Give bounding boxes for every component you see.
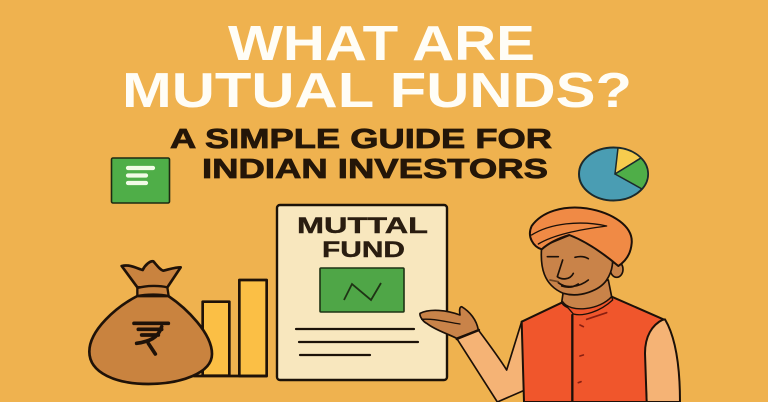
- title: [122, 17, 632, 118]
- document sheet: [277, 205, 447, 380]
- right arm: [643, 319, 680, 402]
- subtitle: [170, 123, 552, 184]
- title: WHAT ARE: [228, 17, 535, 71]
- document text lines: [296, 329, 418, 355]
- left arm and sleeve: [457, 322, 525, 402]
- document: mutual fund: [277, 205, 447, 380]
- icon: bar chart: [193, 280, 267, 376]
- hand: [420, 307, 479, 339]
- icon: money bag with rupee: [89, 261, 212, 384]
- subtitle: A SIMPLE GUIDE FOR: [170, 123, 552, 154]
- title: MUTUAL FUNDS?: [122, 64, 632, 118]
- presenter figure: [420, 207, 680, 402]
- subtitle: INDIAN INVESTORS: [202, 153, 548, 184]
- icon: pie chart: [579, 148, 648, 200]
- turban: [530, 207, 632, 266]
- icon: green chat card: [112, 158, 170, 203]
- face: [541, 235, 613, 295]
- ear: [610, 261, 623, 277]
- document heading: FUND: [322, 237, 405, 262]
- vest: [522, 297, 663, 402]
- document heading: [297, 213, 428, 262]
- green banknote: [320, 268, 404, 312]
- document heading: MUTTAL: [297, 213, 428, 238]
- neck and collar: [562, 280, 613, 315]
